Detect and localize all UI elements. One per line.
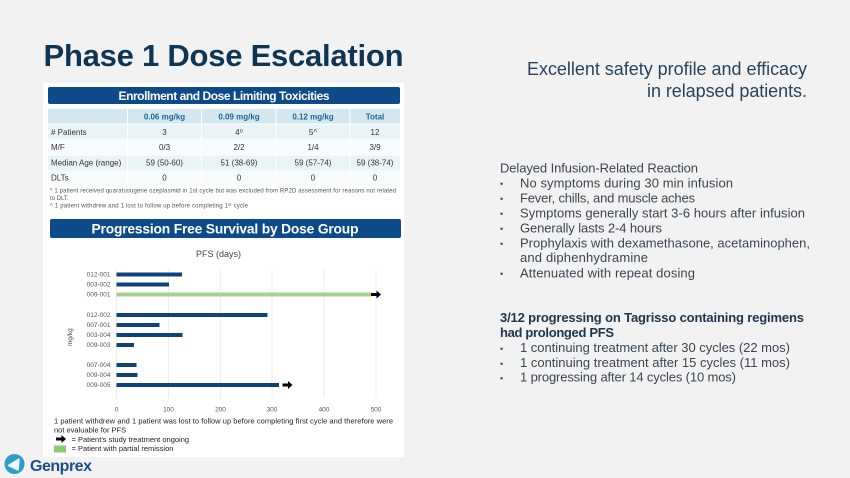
row labels: 007-004 [87,362,111,369]
subtitle callout: Excellent safety profile and efficacy [527,59,807,79]
table footnotes: ⁰ 1 patient received quaratusugene ozeplasmid in 1st cycle but was excluded from RP2D assessment for reasons not related [50,188,396,194]
row labels: 012-001 [87,272,111,278]
legend: = Patient's study treatment ongoing [72,435,189,444]
text block: infusion reaction: Prophylaxis with dexamethasone, acetaminophen, [520,236,810,250]
row labels [87,272,111,389]
arrows: treatment ongoing [282,290,381,389]
table: enrollment and dose limiting toxicities: 2/2 [233,143,245,152]
text block: infusion reaction: • [500,194,503,204]
table heading: Enrollment and Dose Limiting Toxicities [118,89,330,103]
axis labels: 0 [115,406,119,414]
table: enrollment and dose limiting toxicities: 0 [311,174,316,182]
table: enrollment and dose limiting toxicities: 0.12 mg/kg [292,112,334,122]
text block: infusion reaction: • [500,269,503,279]
table heading [48,87,400,104]
table: enrollment and dose limiting toxicities: 5^ [309,128,317,137]
table: enrollment and dose limiting toxicities: 12 [371,128,380,137]
text block: infusion reaction: No symptoms during 30 min infusion [520,176,733,190]
table: enrollment and dose limiting toxicities: 3 [162,128,167,137]
table: enrollment and dose limiting toxicities: 59 (57-74) [295,158,332,168]
legend [54,435,189,453]
chart note: 1 patient withdrew and 1 patient was lost to follow up before completing first cycle and therefore were [54,416,393,426]
text block: Tagrisso regimens [500,310,804,384]
text block: infusion reaction: • [500,179,503,189]
table: enrollment and dose limiting toxicities: 0 [237,174,242,182]
text block: infusion reaction [500,160,810,280]
table: enrollment and dose limiting toxicities: 59 (50-60) [146,158,183,168]
axis labels [115,406,382,414]
axis labels: 400 [319,406,330,414]
text block: Tagrisso regimens: 1 continuing treatment after 30 cycles (22 mos) [520,340,790,355]
chart: progression free survival [50,219,401,453]
logo: Genprex: Genprex [30,458,92,475]
text block: Tagrisso regimens: 1 progressing after 14 cycles (10 mos) [520,370,736,384]
text block: Tagrisso regimens: had prolonged PFS [500,325,614,340]
table: enrollment and dose limiting toxicities: M/F [51,143,65,152]
text block: Tagrisso regimens: • [500,344,503,354]
table: enrollment and dose limiting toxicities: 0/3 [159,143,171,152]
table: enrollment and dose limiting toxicities [48,87,400,210]
text block: Tagrisso regimens: 1 continuing treatment after 15 cycles (11 mos) [520,355,790,370]
table: enrollment and dose limiting toxicities: 0 [373,174,378,182]
text block: Tagrisso regimens: 3/12 progressing on Tagrisso containing regimens [500,310,804,325]
text block: Tagrisso regimens: • [500,359,503,369]
table: enrollment and dose limiting toxicities: DLTs [51,174,69,182]
table footnotes [50,188,396,210]
chart: progression free survival: mg/kg [67,328,74,346]
table footnotes: to DLT. [50,196,69,202]
table: enrollment and dose limiting toxicities: 3/9 [369,143,381,152]
chart heading [50,219,401,238]
row labels: 012-002 [87,312,111,319]
text block: infusion reaction: • [500,209,503,219]
text block: infusion reaction: and diphenhydramine [520,250,648,265]
row labels: 007-001 [87,322,111,329]
axis labels: 200 [215,406,226,414]
row labels: 003-004 [87,332,111,339]
chart note: not evaluable for PFS [54,426,126,434]
text block: infusion reaction: Fever, chills, and muscle aches [520,190,696,206]
bars [116,272,372,387]
row labels: 009-005 [87,382,111,389]
text block: infusion reaction: Delayed Infusion-Related Reaction [500,160,698,176]
row labels: 009-004 [87,372,111,379]
chart note [54,416,393,434]
axis labels: 500 [371,406,382,414]
logo: Genprex [4,454,92,475]
table: enrollment and dose limiting toxicities: 0.09 mg/kg [218,112,260,122]
axis labels: 100 [163,406,174,414]
row labels: 009-001 [87,292,111,298]
table: enrollment and dose limiting toxicities: 0.06 mg/kg [144,112,185,122]
table: enrollment and dose limiting toxicities: 51 (38-69) [221,158,258,168]
subtitle callout [527,59,807,101]
chart: progression free survival: PFS (days) [196,249,241,259]
text block: Tagrisso regimens: • [500,374,503,384]
table: enrollment and dose limiting toxicities: Median Age (range) [51,158,122,168]
table: enrollment and dose limiting toxicities: 4⁰ [235,128,243,137]
row labels: 009-003 [87,342,111,349]
chart heading: Progression Free Survival by Dose Group [92,222,358,236]
subtitle callout: in relapsed patients. [647,81,807,101]
table: enrollment and dose limiting toxicities: 59 (38-74) [357,158,394,168]
table: enrollment and dose limiting toxicities: # Patients [51,128,87,137]
table: enrollment and dose limiting toxicities: Total [366,112,384,122]
text block: infusion reaction: • [500,239,503,249]
table: enrollment and dose limiting toxicities: 0 [162,174,167,182]
panel: clinical figures [43,83,404,457]
text block: infusion reaction: Generally lasts 2-4 hours [520,220,662,236]
table: enrollment and dose limiting toxicities: 1/4 [307,143,319,152]
text block: infusion reaction: • [500,224,503,234]
axis labels: 300 [267,406,278,414]
title: Phase 1 Dose Escalation [44,38,404,73]
table footnotes: ^ 1 patient withdrew and 1 lost to follow up before completing 1ˢᵗ cycle [50,202,249,210]
text block: infusion reaction: Symptoms generally start 3-6 hours after infusion [520,206,805,220]
legend: = Patient with partial remission [72,444,173,453]
text block: infusion reaction: Attenuated with repeat dosing [520,266,695,280]
row labels: 003-002 [87,282,111,288]
